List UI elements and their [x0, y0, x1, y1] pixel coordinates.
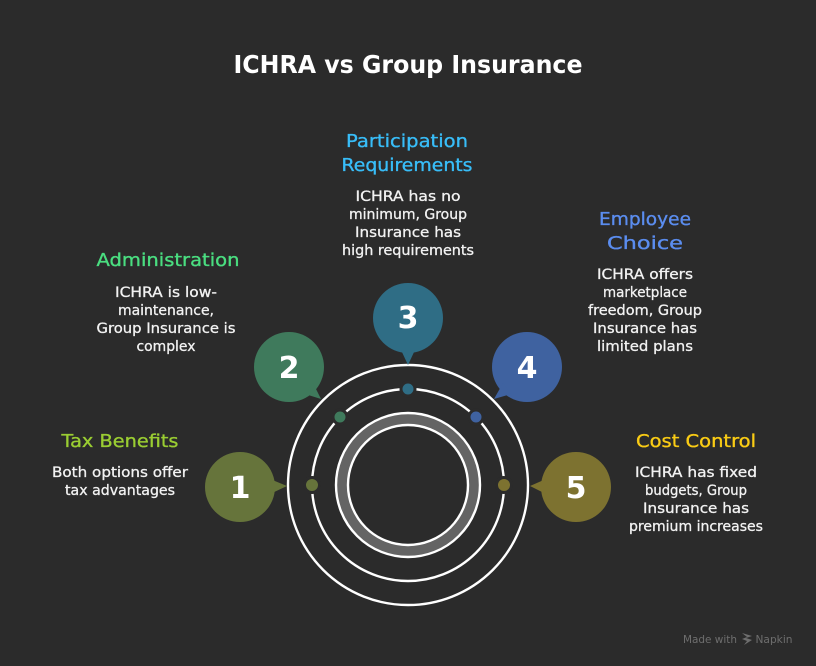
description 4: Insurance has	[593, 321, 697, 337]
description 1	[52, 465, 188, 499]
watermark: Napkin	[756, 633, 793, 646]
heading 5: Cost Control	[636, 431, 756, 452]
heading 2: Administration	[96, 250, 240, 271]
description 5: budgets, Group	[645, 483, 747, 499]
description 2: complex	[136, 339, 196, 355]
number 3: 3	[398, 301, 418, 336]
ring marker 2	[333, 410, 347, 424]
description 1: tax advantages	[65, 483, 175, 499]
ring marker 1	[304, 478, 320, 492]
number 5: 5	[566, 471, 586, 506]
bubble 3	[373, 283, 443, 365]
step 3: participation requirements	[342, 131, 474, 396]
description 4: freedom, Group	[588, 303, 702, 319]
description 1: Both options offer	[52, 465, 188, 481]
icon: napkin logo	[742, 633, 752, 645]
description 5: ICHRA has fixed	[635, 465, 757, 481]
number 2: 2	[279, 351, 299, 386]
description 5: premium increases	[629, 519, 763, 535]
description 2: maintenance,	[118, 303, 214, 319]
description 4: marketplace	[603, 285, 687, 301]
bubble 2	[254, 332, 324, 402]
bubble 1	[205, 452, 287, 522]
step 1: tax benefits	[52, 431, 320, 522]
description 5: Insurance has	[643, 501, 749, 517]
step 5: cost control	[496, 431, 763, 535]
heading 1: Tax Benefits	[60, 431, 178, 452]
description 3: Insurance has	[355, 225, 461, 241]
step 4: employee choice: Choice	[607, 233, 683, 254]
description 3	[342, 189, 474, 259]
description 4	[588, 267, 702, 355]
description 2: ICHRA is low-	[115, 285, 217, 301]
description 4: limited plans	[597, 339, 693, 355]
title: ICHRA vs Group Insurance	[234, 50, 582, 79]
watermark	[683, 633, 793, 646]
bubble 4	[492, 332, 562, 402]
description 3: high requirements	[342, 243, 474, 259]
description 4: ICHRA offers	[597, 267, 693, 283]
heading 4: Employee	[599, 209, 691, 230]
description 3: minimum, Group	[349, 207, 467, 223]
ring marker 5	[496, 478, 512, 492]
ring marker 4	[469, 410, 483, 424]
watermark: Made with	[683, 633, 737, 646]
ring marker 3	[401, 382, 415, 396]
number 1: 1	[230, 471, 250, 506]
description 2: Group Insurance is	[96, 321, 236, 337]
number 4: 4	[517, 351, 537, 386]
description 2	[96, 285, 236, 355]
description 3: ICHRA has no	[356, 189, 460, 205]
step 2: administration	[96, 250, 347, 424]
step 3: participation requirements: Requirements	[342, 155, 472, 176]
description 5	[629, 465, 763, 535]
concentric ring diagram	[288, 365, 528, 605]
bubble 5	[530, 452, 611, 522]
heading 3: Participation	[346, 131, 468, 152]
step 4: employee choice	[469, 209, 702, 424]
